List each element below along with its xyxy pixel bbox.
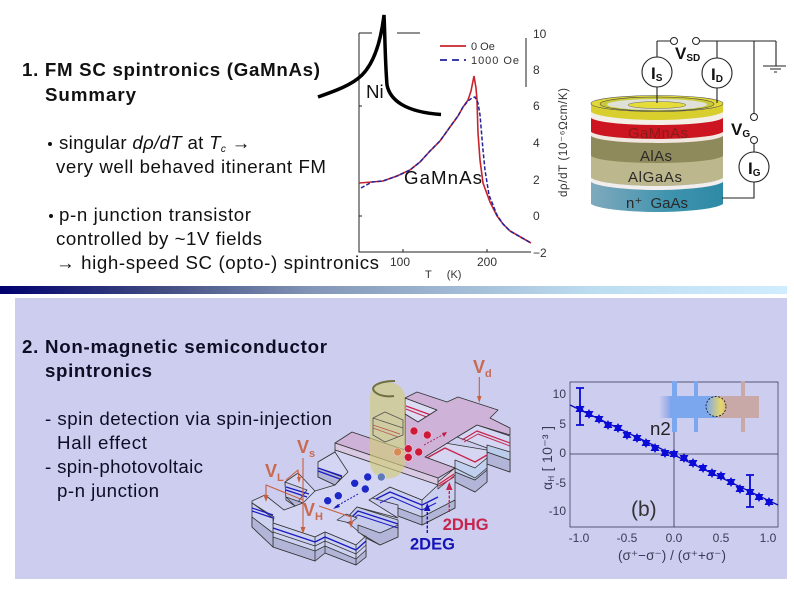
terminals [670,38,758,144]
label: Vs: V [297,437,309,457]
error bars [576,388,754,507]
data markers [576,404,774,507]
contact: top rim [591,103,723,120]
ground symbol [763,41,786,72]
y tick labels: 5 [559,417,566,431]
layer labels: AlGaAs [628,169,682,186]
label: VL: V [265,461,277,481]
layer: GaMnAs [591,118,723,139]
y tick labels: -5 [555,476,566,490]
flow arrows [424,433,446,445]
circuit wiring [657,41,776,198]
axis tick labels: 6 [533,99,540,113]
axis tick labels: 200 [477,255,497,269]
voltage probes [266,377,479,529]
axis tick labels: 2 [533,173,540,187]
divider bar [0,286,787,294]
text block: singular d rho dT [48,132,326,177]
meter: IG [739,152,769,182]
illuminated optical beam [370,382,405,478]
y tick labels: -10 [549,504,566,518]
label: GaMnAs curve: GaMnAs [404,167,482,188]
label: VG: V [731,120,742,139]
meter: IS: I [651,64,656,83]
legend: 1000 Oe [471,55,519,67]
y tick labels: 10 [553,387,566,401]
text block: section 2 heading: spintronics [45,360,152,381]
right upper block [457,425,510,472]
large lower block [372,468,455,525]
layer: AlAs [591,135,723,163]
label: VSD: SD [686,53,700,64]
meter: IS [642,57,672,87]
text block: section 2 bullets: p-n junction [57,480,159,501]
right lower block [425,443,487,492]
axis tick labels: 10 [533,27,547,41]
layer: AlGaAs [591,156,723,186]
text block: section 2 bullets: Hall effect [57,432,148,453]
chart: d rho / dT versus temperature [359,27,570,281]
axis tick labels: 100 [390,255,410,269]
text block: section 1 heading [22,59,320,105]
2DEG arrow [426,510,428,533]
chart: alpha H versus circular polarization [539,381,778,563]
label: VG: G [742,129,750,140]
front arm [273,523,366,565]
label: VSD: V [675,44,686,63]
label: n2: n2 [650,418,671,439]
meter: ID: I [711,65,716,84]
lower right arm [345,507,398,545]
label: VH: V [303,500,315,520]
x axis label: (σ⁺−σ⁻) / (σ⁺+σ⁻) [618,548,726,563]
n-side surface [252,450,438,545]
layer labels [626,125,688,212]
label: Ni: Ni [366,81,384,102]
panel: non-magnetic semiconductor spintronics [15,298,787,579]
text block: p-n junction transistor: controlled by ~1V fields [56,228,262,249]
fit line [570,405,778,505]
text block: p-n junction transistor [49,204,379,273]
text block: singular d rho dT: c [221,144,226,155]
label: Vs: s [309,448,315,460]
layer: n+ GaAs [591,181,723,212]
text block: section 1 heading: Summary [45,84,137,105]
text block: section 2 bullets: - spin detection via spin-injection [45,408,332,429]
x tick labels: -1.0 [569,531,590,545]
2DHG arrow [448,488,450,512]
label: Vd: d [485,368,492,380]
label: (b): (b) [631,498,657,521]
left arm [252,503,273,547]
text block: section 2 bullets [45,408,332,501]
legend: 0 Oe [471,41,495,53]
x axis label: T (K) [425,269,461,281]
y tick labels [549,387,566,518]
small hall slit [337,514,357,523]
x tick labels [569,531,777,545]
meter: ID [702,58,732,88]
electrons [324,473,385,505]
y tick labels: 0 [559,446,566,460]
y axis label: [ 10⁻³ ] [539,426,555,476]
x tick labels: 0.0 [666,531,683,545]
text block: singular d rho dT: singular dρ/dT at T [59,132,221,153]
diagram: GaMnAs transistor stack [591,38,786,212]
contact box inside beam [373,412,403,442]
inset: device and laser spot [659,381,759,432]
y axis label: α [539,482,555,490]
top contact notch [405,398,437,422]
small pad [285,473,315,506]
x tick labels: -0.5 [617,531,638,545]
y axis label: dρ/dT (10⁻⁶Ωcm/K) [558,88,570,197]
layer labels: GaMnAs [628,125,688,142]
p-side pink surface [335,392,510,485]
curve: 0 Oe [359,76,531,243]
axis tick labels [390,27,547,269]
upper left block [318,452,348,485]
y axis label: H [547,476,556,482]
text block: section 2 heading [22,336,327,381]
text block: section 2 heading: 2. Non-magnetic semiconductor [22,336,327,357]
axis tick labels: −2 [533,246,547,260]
text block: p-n junction transistor: → high-speed SC (opto-) spintronics [56,252,379,273]
label: 2DHG: 2DHG [443,516,489,534]
meter: IS: S [656,73,663,84]
text block: singular d rho dT: → [226,132,251,153]
holes [394,427,431,461]
meter: IG: G [753,168,761,179]
meter: ID: D [716,74,723,85]
curve: 1000 Oe [361,97,531,243]
layer labels: AlAs [640,148,672,165]
diagram: spin-injection Hall device [252,357,510,565]
text block: p-n junction transistor: p-n junction transistor [59,204,251,225]
label: VL: L [277,472,284,484]
x tick labels: 0.5 [713,531,730,545]
axis tick labels: 0 [533,209,540,223]
label: Vd: V [473,357,485,377]
layer labels: n⁺ GaAs [626,195,688,212]
x tick labels: 1.0 [760,531,777,545]
text block: section 1 heading: 1. FM SC spintronics (GaMnAs) [22,59,320,80]
text block: singular d rho dT: very well behaved itinerant FM [56,156,326,177]
label: 2DEG: 2DEG [410,536,455,554]
axis tick labels: 4 [533,136,540,150]
axis tick labels: 8 [533,63,540,77]
rotation arrow [373,381,395,396]
meter: IG: I [748,159,753,178]
text block: section 2 bullets: - spin-photovoltaic [45,456,203,477]
label: VH: H [315,511,323,523]
curve: Ni resistivity derivative [318,15,441,114]
legend [440,41,519,67]
